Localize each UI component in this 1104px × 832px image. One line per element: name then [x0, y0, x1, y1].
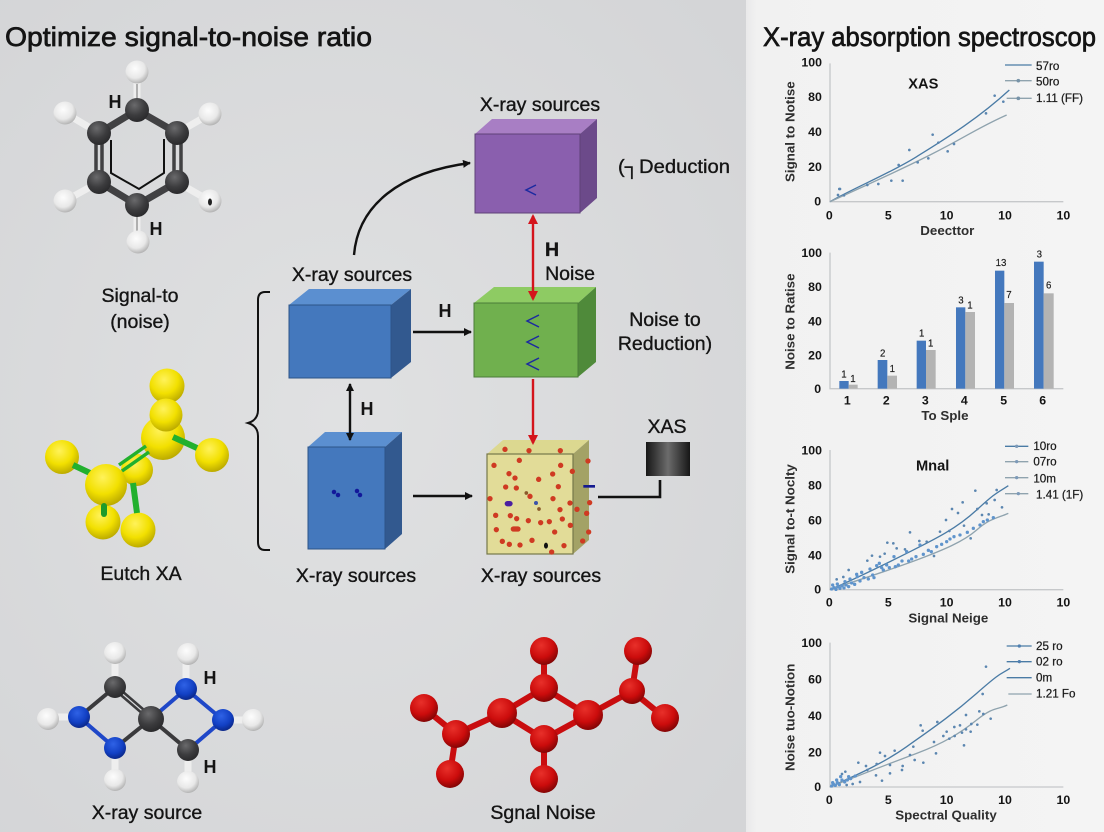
- chart 4: scatter spectral quality: 1.21 Fo: [1036, 688, 1076, 701]
- arrow: red double between purple and green: [532, 216, 534, 299]
- chart 2: bar chart: 20: [808, 348, 822, 362]
- connector to XAS detector: [598, 480, 660, 497]
- chart 1: line chart XAS: 0: [814, 194, 821, 208]
- arrow: red down: [532, 379, 534, 443]
- label: X-ray source: X-ray source: [92, 802, 202, 824]
- chart 4: scatter spectral quality: 10: [1056, 793, 1070, 807]
- chart 4: scatter spectral quality: 10: [998, 793, 1012, 807]
- chart 2: bar chart: 40: [808, 314, 822, 328]
- label: H Noise: Noise: [545, 263, 595, 285]
- label: signal-to noise: (noise): [110, 311, 170, 333]
- cube: purple: [475, 119, 597, 213]
- chart 3: scatter Mnal: 1.41 (1F): [1036, 488, 1083, 501]
- chart 4: scatter spectral quality: 0: [826, 793, 833, 807]
- chart 4: scatter spectral quality: 02 ro: [1036, 656, 1063, 669]
- arrow: double vertical: [349, 384, 351, 440]
- cube: green: [474, 287, 596, 377]
- chart 1: line chart XAS: 100: [801, 56, 822, 70]
- chart 2: bar chart: 1: [928, 338, 933, 349]
- chart 4: scatter spectral quality: 60: [808, 672, 822, 686]
- chart 1: line chart XAS: Deecttor: [920, 223, 974, 238]
- chart 1: line chart XAS: 1.11 (FF): [1036, 92, 1083, 105]
- chart 2: bar chart: 3: [1037, 249, 1042, 260]
- label: X-ray sources top: X-ray sources: [480, 94, 600, 116]
- arrow: curved to purple cube: [354, 163, 470, 255]
- chart 2: bar chart: 6: [1046, 281, 1051, 292]
- chart 3: scatter Mnal: 10m: [1033, 472, 1056, 485]
- chart 3: scatter Mnal: Signal to-t Noclty: [783, 464, 798, 574]
- chart 2: bar chart: Noise to Ratise: [783, 274, 798, 370]
- icon: XAS detector: [646, 442, 690, 476]
- cube: lower blue: [308, 432, 402, 549]
- chart 3: scatter Mnal: 07ro: [1033, 456, 1057, 469]
- chart 2: bar chart: 1: [841, 370, 847, 381]
- molecule: benzene ring: H: [150, 219, 162, 239]
- label: deduction: (┐Deduction: [618, 156, 730, 180]
- chart 1: line chart XAS: 20: [808, 160, 822, 174]
- arrow: blue to green: [413, 331, 471, 333]
- chart 3: scatter Mnal: 10: [998, 596, 1012, 610]
- chart 3: scatter Mnal: 0: [814, 583, 821, 597]
- chart 3: scatter Mnal: 0: [826, 596, 833, 610]
- chart 2: bar chart: [783, 246, 1063, 423]
- chart 1: line chart XAS: 10: [1056, 208, 1070, 222]
- arrow: lower blue to yellow: [413, 495, 472, 497]
- chart 4: scatter spectral quality: 0: [814, 780, 821, 794]
- cube: yellow sample with particles: [487, 440, 595, 554]
- chart 3: scatter Mnal: 10ro: [1033, 440, 1057, 453]
- label: noise to reduction: Noise to: [629, 309, 701, 331]
- molecule: benzene ring: H: [108, 92, 122, 112]
- chart 1: line chart XAS: 40: [808, 125, 822, 139]
- label: signal-to noise: Signal-to: [102, 285, 179, 307]
- chart 3: scatter Mnal: 100: [801, 443, 822, 457]
- molecule: red atoms: [410, 637, 679, 793]
- chart 2: bar chart: 3: [958, 295, 964, 306]
- cube: blue source: [289, 289, 411, 378]
- chart 2: bar chart: 2: [883, 393, 890, 407]
- chart 4: scatter spectral quality: 10: [940, 793, 954, 807]
- chart 2: bar chart: 0: [814, 382, 821, 396]
- chart 3: scatter Mnal: Mnal: [916, 458, 949, 474]
- chart 1: line chart XAS: Signal to Notise: [783, 81, 798, 182]
- chart 4: scatter spectral quality: 25 ro: [1036, 640, 1063, 653]
- chart 1: line chart XAS: 10: [998, 208, 1012, 222]
- label: X-ray sources yellow: X-ray sources: [481, 565, 601, 587]
- molecule: blue nitrogen and carbon rings: H: [204, 668, 216, 688]
- chart 4: scatter spectral quality: 0m: [1036, 672, 1052, 685]
- label: H on arrow: H: [438, 301, 452, 321]
- molecule: blue nitrogen and carbon rings: [37, 642, 264, 793]
- chart 2: bar chart: 80: [808, 280, 822, 294]
- label: X-ray sources middle: X-ray sources: [292, 264, 412, 286]
- chart 1: line chart XAS: [783, 56, 1083, 238]
- chart 3: scatter Mnal: 5: [885, 596, 892, 610]
- chart 2: bar chart: 2: [880, 349, 885, 360]
- chart 2: bar chart: 1: [844, 393, 851, 407]
- chart 4: scatter spectral quality: Spectral Quality: [895, 807, 997, 822]
- chart 1: line chart XAS: 80: [808, 90, 822, 104]
- chart 2: bar chart: 1: [850, 374, 856, 385]
- chart 2: bar chart: To Sple: [921, 408, 969, 423]
- label: H beside double arrow: H: [360, 399, 374, 419]
- chart 3: scatter Mnal: 60: [808, 513, 822, 527]
- chart 2: bar chart: 1: [967, 300, 973, 311]
- chart 3: scatter Mnal: 10: [940, 596, 954, 610]
- label: H Noise: H: [545, 239, 559, 261]
- chart 2: bar chart: 3: [922, 393, 929, 407]
- chart 2: bar chart: 6: [1039, 393, 1046, 407]
- chart 4: scatter spectral quality: Noise tuo-Notion: [783, 664, 798, 771]
- chart 1: line chart XAS: 5: [885, 208, 892, 222]
- bracket: [248, 292, 270, 550]
- chart 2: bar chart: 1: [919, 329, 924, 340]
- chart 2: bar chart: 7: [1006, 290, 1012, 301]
- heading: charts: X-ray absorption spectroscop: [763, 22, 1096, 52]
- chart 4: scatter spectral quality: 100: [801, 636, 822, 650]
- chart 1: line chart XAS: 10: [940, 208, 954, 222]
- chart 3: scatter Mnal: [783, 440, 1083, 625]
- molecule: benzene ring: [54, 60, 222, 254]
- chart 1: line chart XAS: 50ro: [1036, 75, 1059, 88]
- chart 1: line chart XAS: 0: [826, 208, 833, 222]
- chart 1: line chart XAS: 57ro: [1036, 60, 1059, 73]
- panel: left diagram background: [0, 0, 746, 832]
- chart 4: scatter spectral quality: 20: [808, 745, 822, 759]
- chart 4: scatter spectral quality: 5: [885, 793, 892, 807]
- chart 2: bar chart: 5: [1000, 393, 1007, 407]
- label: XAS: XAS: [647, 416, 687, 438]
- panel: right charts background: [746, 0, 1104, 832]
- chart 3: scatter Mnal: Signal Neige: [908, 610, 988, 625]
- label: Eutch XA: Eutch XA: [100, 563, 182, 585]
- chart 3: scatter Mnal: 10: [1056, 596, 1070, 610]
- label: X-ray sources lower blue: X-ray sources: [296, 565, 416, 587]
- chart 2: bar chart: 13: [996, 258, 1006, 269]
- chart 4: scatter spectral quality: [783, 636, 1076, 822]
- chart 1: line chart XAS: XAS: [908, 77, 939, 93]
- molecule: blue nitrogen and carbon rings: H: [204, 757, 216, 777]
- chart 2: bar chart: 100: [801, 246, 822, 260]
- chart 3: scatter Mnal: 80: [808, 478, 822, 492]
- label: Sgnal Noise: Sgnal Noise: [490, 802, 596, 824]
- title: Optimize signal-to-noise ratio: [5, 22, 372, 52]
- molecule: yellow atoms with green bonds: [45, 368, 229, 548]
- chart 4: scatter spectral quality: 40: [808, 709, 822, 723]
- chart 3: scatter Mnal: 40: [808, 548, 822, 562]
- chart 2: bar chart: 1: [890, 364, 895, 375]
- chart 2: bar chart: 4: [961, 393, 968, 407]
- label: noise to reduction: Reduction): [618, 333, 712, 355]
